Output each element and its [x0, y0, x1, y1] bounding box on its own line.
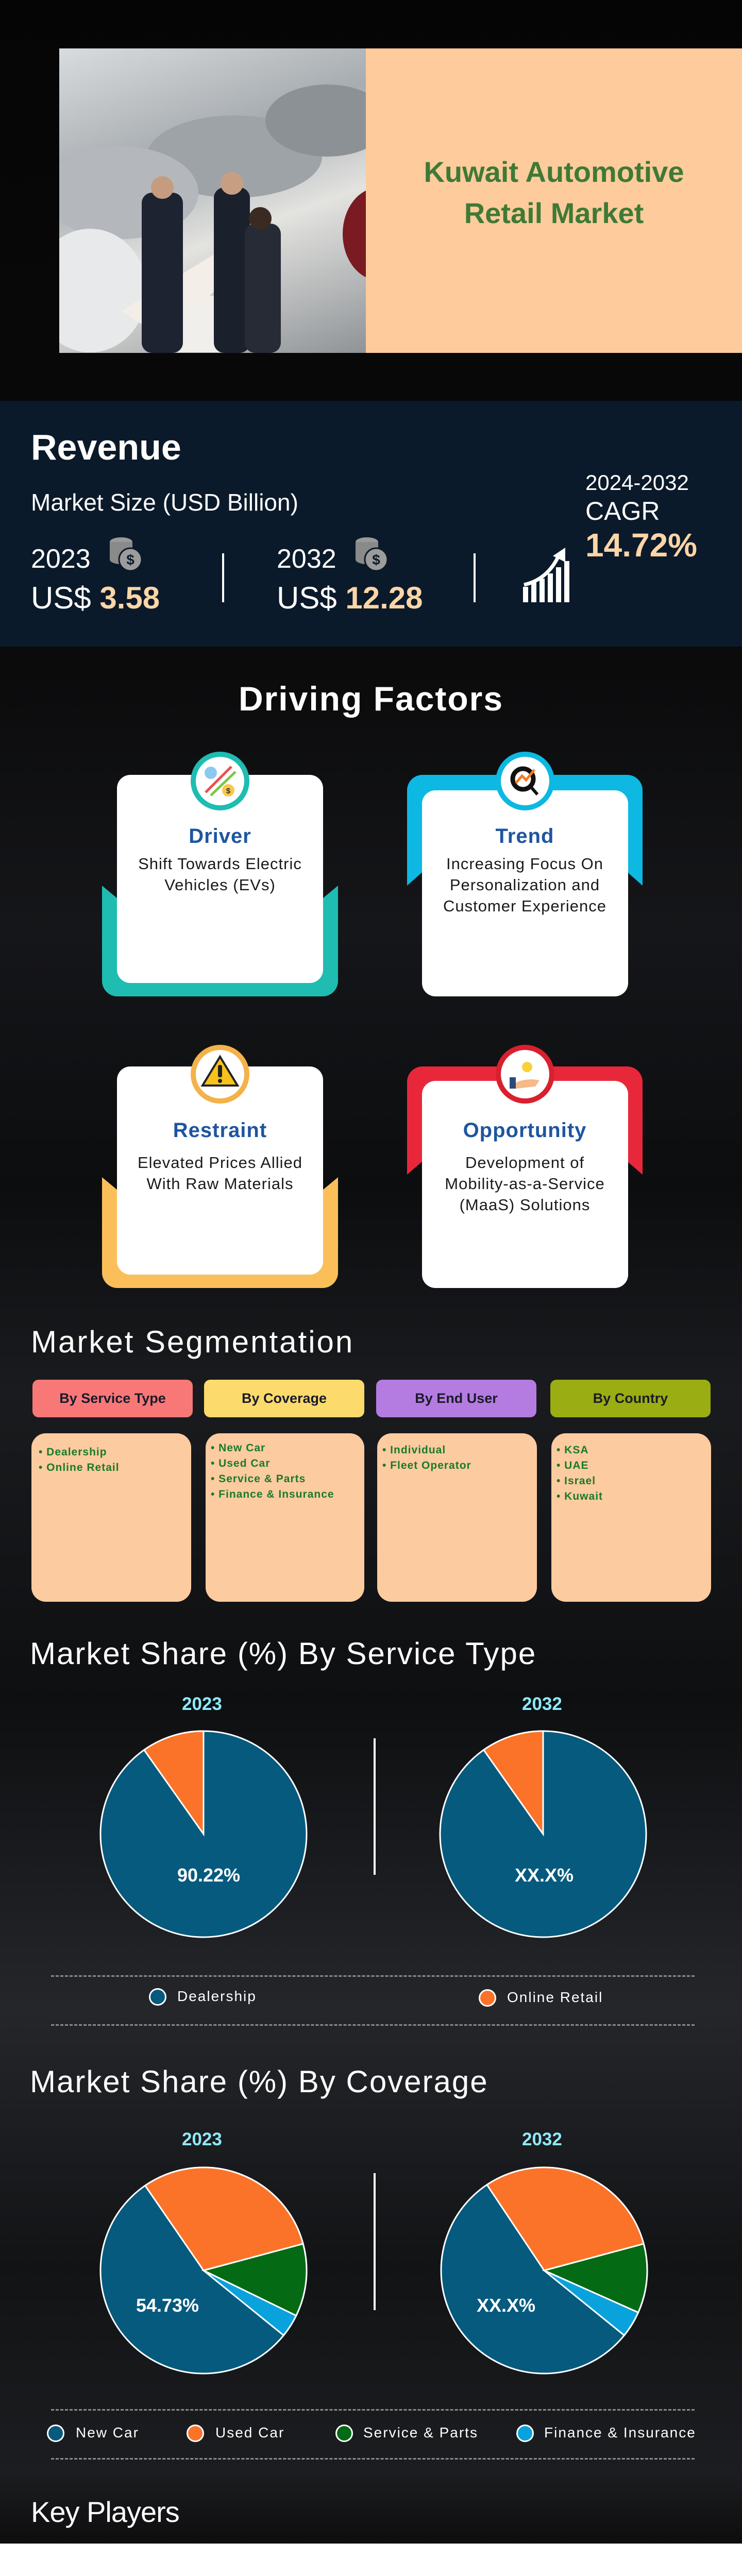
segment: coverage: • Used Car [211, 1458, 270, 1469]
card: opportunity [407, 1045, 643, 1288]
legend: coverage [47, 2425, 696, 2442]
segment: country: By Country [593, 1391, 668, 1406]
segment: end user: By End User [415, 1391, 498, 1406]
card: driver: Shift Towards Electric [138, 855, 302, 873]
card: restraint: Restraint [173, 1119, 267, 1142]
card: opportunity: Mobility-as-a-Service [445, 1175, 605, 1193]
legend: service type [149, 1988, 603, 2007]
title panel [366, 48, 742, 353]
card: driver: Vehicles (EVs) [164, 876, 276, 894]
icon: driver [191, 752, 249, 810]
segment: end user [376, 1380, 537, 1602]
icon: opportunity [496, 1045, 554, 1104]
icon: coins: $ [126, 552, 134, 568]
card: opportunity: Development of [465, 1154, 584, 1172]
segment: coverage [204, 1380, 364, 1602]
pie chart: coverage 2023 [100, 2166, 308, 2374]
pie chart: coverage 2023: 54.73% [136, 2295, 199, 2316]
stat 2032: US$ 12.28 [277, 581, 423, 615]
heading: key players: Key Players [31, 2496, 179, 2528]
segment: country: • UAE [556, 1460, 589, 1471]
icon: growth chart [523, 548, 569, 602]
segment: country: • KSA [556, 1444, 589, 1456]
stat 2023: US$ 3.58 [31, 581, 160, 615]
CAGR: 14.72% [585, 527, 697, 564]
year label 2032: 2032 [522, 2129, 562, 2149]
revenue heading: Revenue [31, 427, 181, 467]
segment: service type [31, 1380, 193, 1602]
hero photo: showroom [59, 48, 366, 353]
legend: coverage: Finance & Insurance [544, 2425, 696, 2441]
panel: key players logos [0, 2544, 742, 2576]
card: opportunity: Opportunity [463, 1119, 586, 1142]
heading: market segmentation: Market Segmentation [31, 1325, 354, 1359]
revenue panel [0, 401, 742, 647]
segment: service type: By Service Type [59, 1391, 166, 1406]
icon: coins: $ [372, 552, 380, 568]
segment: coverage: • New Car [211, 1442, 265, 1454]
card: restraint: With Raw Materials [146, 1175, 294, 1193]
segment: service type: • Online Retail [39, 1462, 120, 1473]
legend: service type: Online Retail [507, 1989, 603, 2005]
heading: market share by coverage: Market Share (%) By Coverage [30, 2064, 488, 2099]
stat 2023: 2023 [31, 544, 91, 574]
legend: coverage: Service & Parts [363, 2425, 478, 2441]
year label 2023: 2023 [182, 2129, 222, 2149]
segment: service type: • Dealership [39, 1446, 107, 1458]
card: opportunity: (MaaS) Solutions [460, 1196, 590, 1214]
title panel: Retail Market [464, 197, 644, 229]
pie chart: service type 2023 [100, 1730, 307, 1938]
stat 2032: 2032 [277, 544, 336, 574]
year label 2023: 2023 [182, 1694, 222, 1714]
segment: country: • Kuwait [556, 1490, 603, 1502]
CAGR: CAGR [585, 497, 660, 526]
segment: end user: • Fleet Operator [382, 1460, 471, 1471]
card: trend: Trend [496, 825, 554, 848]
stat 2023 [31, 537, 160, 615]
segment: country [550, 1380, 711, 1602]
segment: country: • Israel [556, 1475, 596, 1487]
icon: coins [110, 537, 141, 570]
legend: coverage: New Car [76, 2425, 139, 2441]
icon: driver: $ [226, 787, 231, 795]
legend: service type: Dealership [177, 1988, 257, 2004]
title panel: Kuwait Automotive [424, 156, 684, 188]
card: trend: Increasing Focus On [446, 855, 603, 873]
segment: coverage: • Finance & Insurance [211, 1488, 334, 1500]
heading: driving factors: Driving Factors [239, 680, 503, 718]
pie chart: coverage 2032 [440, 2166, 648, 2374]
legend: coverage: Used Car [215, 2425, 284, 2441]
card: driver [102, 752, 338, 996]
card: trend: Customer Experience [443, 897, 606, 915]
CAGR: 2024-2032 [585, 470, 689, 495]
card: driver: Driver [189, 825, 251, 848]
card: restraint [102, 1045, 338, 1288]
segment: coverage: • Service & Parts [211, 1473, 306, 1485]
card: trend: Personalization and [450, 876, 600, 894]
card: restraint: Elevated Prices Allied [138, 1154, 302, 1172]
card: trend [407, 752, 643, 996]
segment: coverage: By Coverage [242, 1391, 327, 1406]
icon: coins [356, 537, 386, 570]
icon: trend [496, 752, 554, 810]
CAGR [585, 470, 697, 564]
pie chart: service type 2023: 90.22% [177, 1865, 240, 1886]
pie chart: coverage 2032: XX.X% [477, 2295, 535, 2316]
segment: end user: • Individual [382, 1444, 446, 1456]
pie chart: service type 2032: XX.X% [515, 1865, 574, 1886]
icon: warning [191, 1045, 249, 1104]
pie chart: service type 2032 [439, 1730, 647, 1938]
heading: market share by service type: Market Share (%) By Service Type [30, 1636, 536, 1671]
year label 2032: 2032 [522, 1694, 562, 1714]
market size label: Market Size (USD Billion) [31, 489, 298, 516]
stat 2032 [277, 537, 423, 615]
